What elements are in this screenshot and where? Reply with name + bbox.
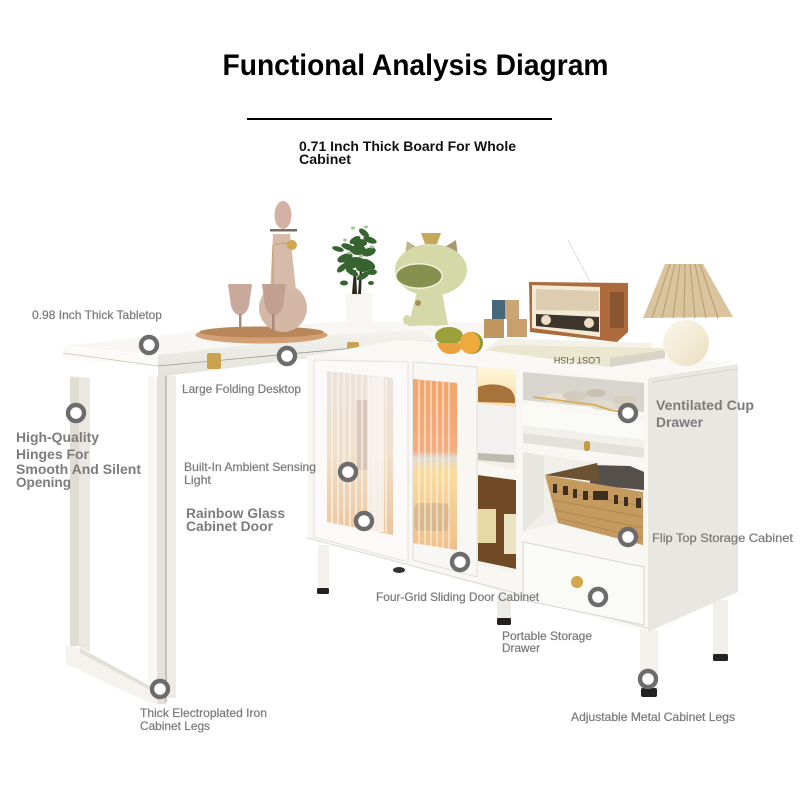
label: cup drawer: Drawer: [656, 414, 704, 430]
open compartment with toaster and bottles: [478, 367, 516, 574]
sliding door right with rainbow glass: [413, 362, 477, 577]
subtitle: board thickness: [299, 138, 516, 167]
label: iron legs: Cabinet Legs: [140, 719, 210, 733]
label: cup drawer: Ventilated Cup: [656, 397, 754, 413]
label: rainbow glass: Rainbow Glass: [186, 505, 285, 521]
label: iron legs: [140, 706, 267, 733]
label: rainbow glass: [186, 505, 285, 534]
label: cup drawer: [656, 397, 754, 430]
label: hinges: Smooth And Silent: [16, 461, 141, 477]
folding tabletop: [63, 322, 490, 377]
decor: pleated table lamp: [643, 264, 733, 366]
label: hinges: Hinges For: [16, 446, 90, 462]
label: hinges: High-Quality: [16, 429, 99, 445]
label: hinges: [16, 429, 141, 490]
sliding door left with rainbow glass: [314, 360, 408, 562]
label: storage drawer: Drawer: [502, 641, 540, 655]
cabinet legs: [317, 545, 728, 697]
subtitle: board thickness: Cabinet: [299, 151, 351, 167]
label: ambient light: Light: [184, 473, 212, 487]
cabinet body: [307, 340, 738, 632]
label: storage drawer: [502, 629, 592, 655]
portable storage drawer: [523, 542, 644, 625]
label: storage drawer: Portable Storage: [502, 629, 592, 643]
decor: stacked books: LOST FISH: [554, 355, 600, 365]
decor: tray, decanter and glasses: [196, 201, 328, 344]
decor: citrus fruit: [435, 327, 483, 354]
decor: green cat figurine: [395, 233, 467, 326]
label: flip top: Flip Top Storage Cabinet: [652, 531, 794, 545]
label: tabletop: 0.98 Inch Thick Tabletop: [32, 308, 162, 322]
decor: photo blocks: [484, 300, 527, 338]
label: ambient light: [184, 460, 316, 487]
label: adjustable legs: Adjustable Metal Cabinet Legs: [571, 710, 735, 724]
label: hinges: Opening: [16, 474, 71, 490]
subtitle: board thickness: 0.71 Inch Thick Board For Whole: [299, 138, 516, 154]
label: rainbow glass: Cabinet Door: [186, 518, 274, 534]
flip top compartment: [523, 433, 644, 557]
label: ambient light: Built-In Ambient Sensing: [184, 460, 316, 474]
decor: stacked books: [485, 338, 665, 367]
hotspot markers: [68, 337, 656, 697]
decor: potted plant: [332, 226, 378, 331]
title: Functional Analysis Diagram: [222, 49, 608, 82]
wicker basket: [545, 463, 644, 545]
label: sliding door cabinet: Four-Grid Sliding Door Cabinet: [376, 590, 540, 604]
title rule: [247, 118, 552, 120]
folding desk legs: [65, 376, 176, 704]
label: iron legs: Thick Electroplated Iron: [140, 706, 267, 720]
ventilated cup drawer: [523, 372, 644, 448]
decor: retro radio: [529, 240, 628, 342]
label: folding desktop: Large Folding Desktop: [182, 382, 301, 396]
illustration: folding desk cabinet: [63, 201, 738, 704]
